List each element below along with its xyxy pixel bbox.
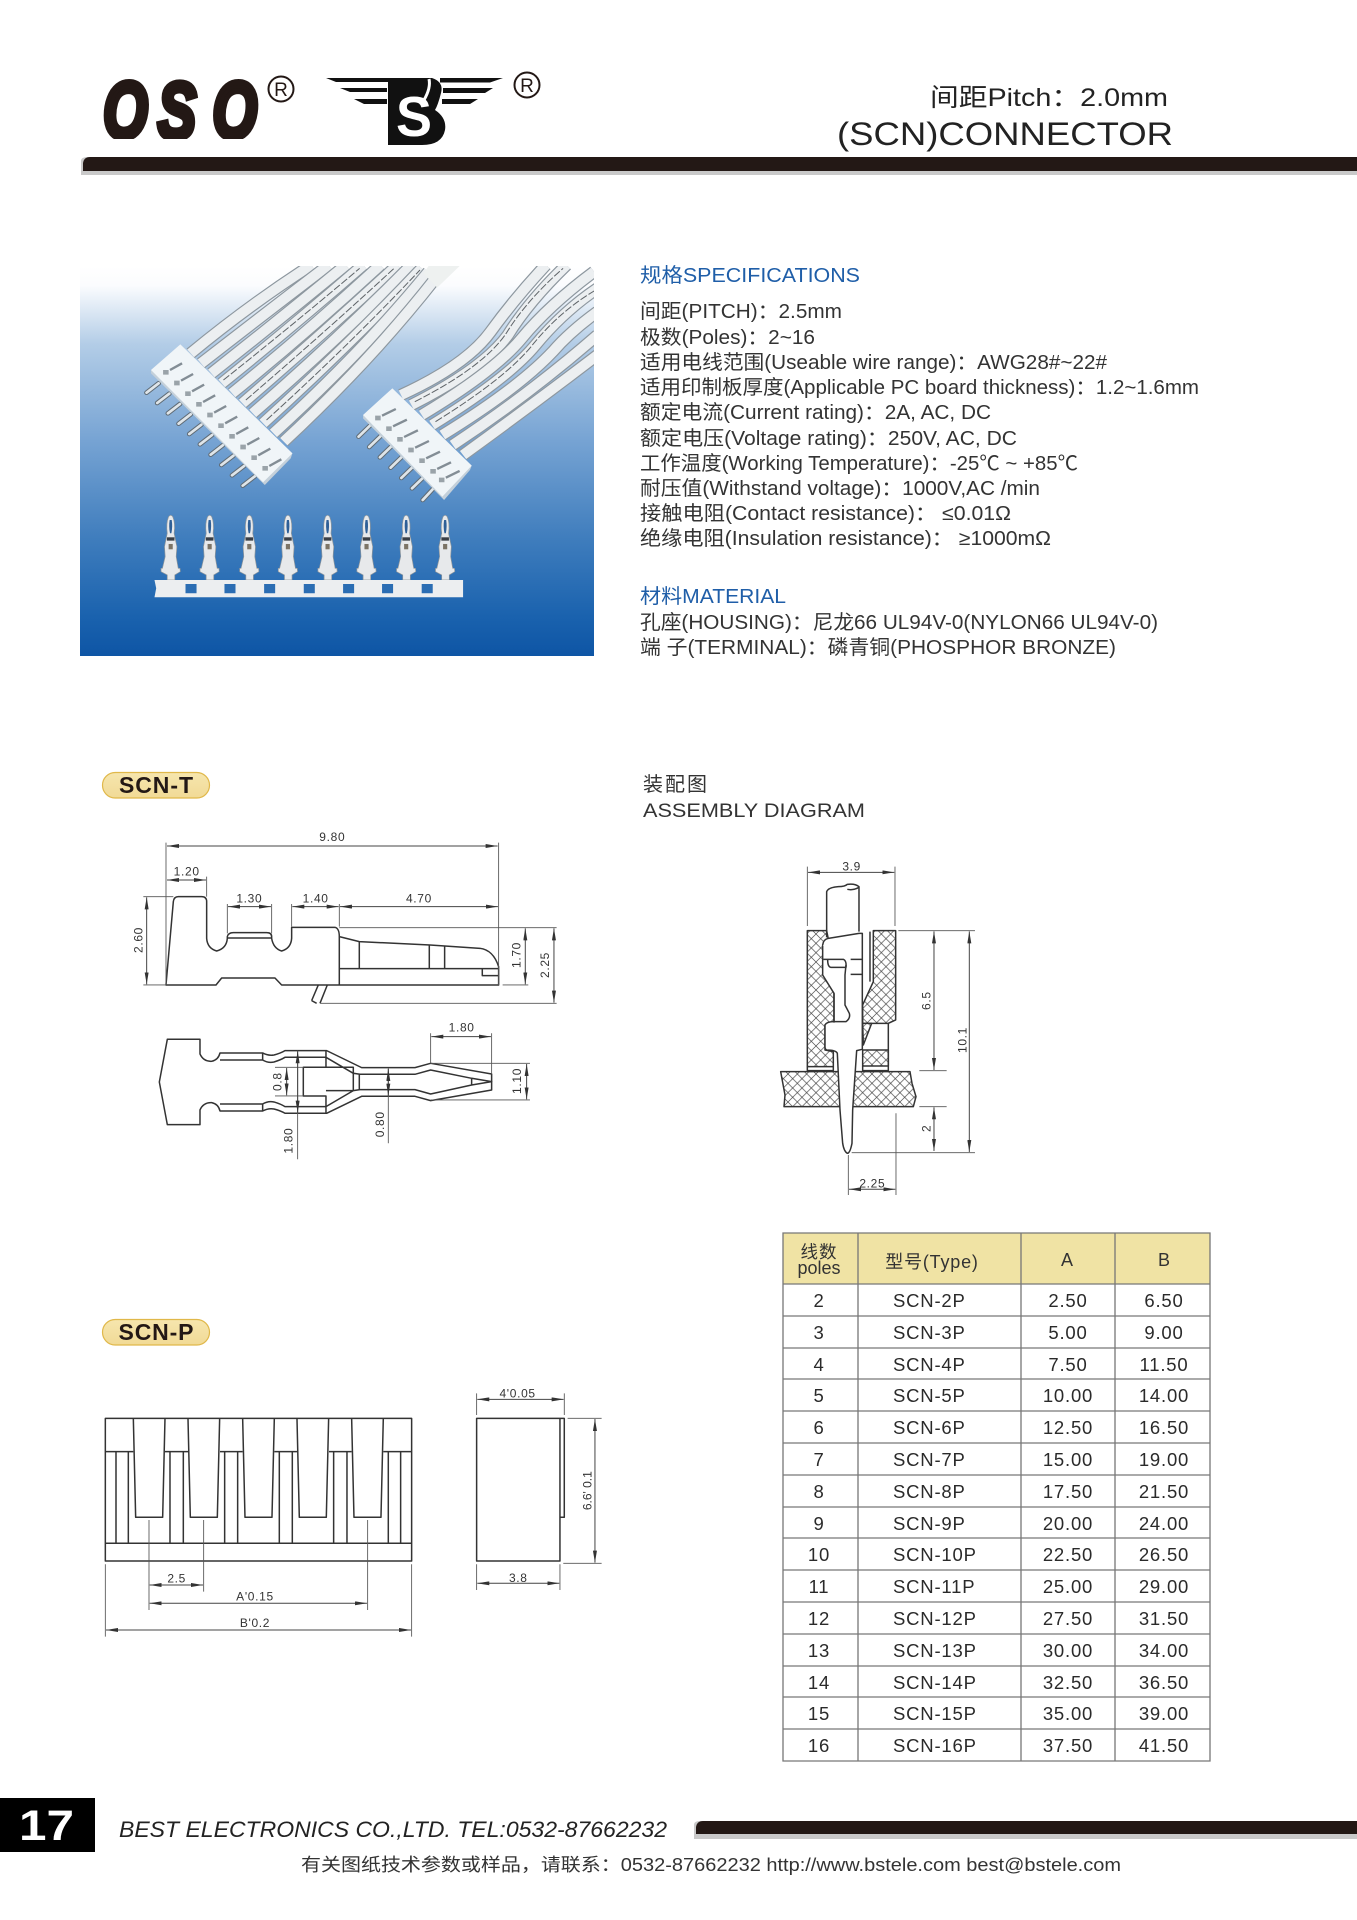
material lines: 孔座(HOUSING)：尼龙66 UL94V-0(NYLON66 UL94V-0) xyxy=(640,611,1158,634)
footer company: BEST ELECTRONICS CO.,LTD. TEL:0532-87662232 xyxy=(119,1817,667,1842)
dimensions: assembly: 6.5 xyxy=(920,991,934,1010)
table rows: 2.50 xyxy=(1048,1290,1088,1311)
table rows: 26.50 xyxy=(1139,1544,1189,1565)
spec lines: 耐压值(Withstand voltage)：1000V,AC /min xyxy=(640,477,1040,500)
spec lines: 极数(Poles)：2~16 xyxy=(640,326,815,349)
dimensions: terminal: 1.80 xyxy=(281,1128,295,1154)
specifications block xyxy=(640,264,1199,659)
table rows: 5.00 xyxy=(1048,1322,1088,1343)
table rows: 27.50 xyxy=(1043,1608,1093,1629)
wires: right bundle xyxy=(401,265,598,455)
terminal strip xyxy=(154,515,463,597)
table rows: SCN-8P xyxy=(893,1481,966,1502)
table rows: 39.00 xyxy=(1139,1703,1189,1724)
logo: TS winged xyxy=(326,72,540,149)
table rows: 37.50 xyxy=(1043,1735,1093,1756)
table rows: 36.50 xyxy=(1139,1672,1189,1693)
table rows: SCN-14P xyxy=(893,1672,977,1693)
spec lines: 适用电线范围(Useable wire range)：AWG28#~22# xyxy=(640,351,1108,374)
material lines: 端 子(TERMINAL)：磷青铜(PHOSPHOR BRONZE) xyxy=(640,636,1116,659)
table header: 线数 xyxy=(800,1242,838,1262)
terminal top view xyxy=(159,1039,492,1125)
footer bar xyxy=(694,1821,1357,1839)
table rows: SCN-5P xyxy=(893,1385,966,1406)
table rows: 29.00 xyxy=(1139,1576,1189,1597)
dimensions: housing: 3.8 xyxy=(509,1571,528,1585)
table rows: SCN-15P xyxy=(893,1703,977,1724)
table rows: 20.00 xyxy=(1043,1513,1093,1534)
table rows: SCN-16P xyxy=(893,1735,977,1756)
table rows: 14.00 xyxy=(1139,1385,1189,1406)
table rows: 7 xyxy=(813,1449,825,1470)
spec lines: 额定电流(Current rating)：2A, AC, DC xyxy=(640,401,991,424)
material lines xyxy=(640,611,1158,659)
header bar xyxy=(81,157,1357,175)
table rows: SCN-13P xyxy=(893,1640,977,1661)
logo: QSQ: R xyxy=(274,80,288,101)
table rows: SCN-3P xyxy=(893,1322,966,1343)
table rows: 19.00 xyxy=(1139,1449,1189,1470)
table rows: 16 xyxy=(808,1735,830,1756)
heading: specifications: 规格SPECIFICATIONS xyxy=(640,264,860,287)
table rows: 21.50 xyxy=(1139,1481,1189,1502)
dimensions: assembly: 3.9 xyxy=(842,860,861,874)
table rows: SCN-4P xyxy=(893,1354,966,1375)
table grid xyxy=(783,1233,1210,1761)
logo: QSQ xyxy=(104,76,294,139)
page number: 17 xyxy=(19,1802,74,1850)
table rows: 7.50 xyxy=(1048,1354,1088,1375)
dimensions: housing: 4'0.05 xyxy=(499,1387,536,1401)
table rows: 16.50 xyxy=(1139,1417,1189,1438)
dimensions: terminal: 4.70 xyxy=(406,891,432,905)
footer contact: 有关图纸技术参数或样品，请联系：0532-87662232 http://www.bstele.com best@bstele.com xyxy=(301,1855,1121,1875)
page number xyxy=(0,1798,95,1852)
table rows: 9 xyxy=(813,1513,825,1534)
table rows: SCN-2P xyxy=(893,1290,966,1311)
table rows: SCN-10P xyxy=(893,1544,977,1565)
heading: assembly diagram: 装配图 xyxy=(643,773,707,796)
drawing: housing SCN-P xyxy=(105,1387,602,1637)
label: SCN-P: SCN-P xyxy=(118,1319,194,1345)
spec lines: 额定电压(Voltage rating)：250V, AC, DC xyxy=(640,427,1017,450)
heading: assembly diagram: ASSEMBLY DIAGRAM xyxy=(643,800,865,822)
table rows: 11 xyxy=(809,1576,829,1597)
housing side view xyxy=(477,1418,564,1561)
table header: A xyxy=(1061,1250,1073,1270)
dimensions: terminal: 2.25 xyxy=(538,952,552,978)
table rows: 6.50 xyxy=(1144,1290,1184,1311)
dimensions: terminal: 1.40 xyxy=(303,891,329,905)
spec lines: 间距(PITCH)：2.5mm xyxy=(640,300,842,323)
dimensions: housing xyxy=(105,1387,602,1637)
logo: TS winged: R xyxy=(520,76,534,97)
spec lines xyxy=(640,300,1199,550)
dimensions: terminal: 2.60 xyxy=(131,927,145,953)
pins: right connector xyxy=(359,425,435,500)
table rows: 31.50 xyxy=(1139,1608,1189,1629)
spec lines: 绝缘电阻(Insulation resistance)： ≥1000mΩ xyxy=(640,527,1051,550)
table rows: 25.00 xyxy=(1043,1576,1093,1597)
table rows: 17.50 xyxy=(1043,1481,1093,1502)
hatched housing and board xyxy=(781,931,916,1107)
dimensions: housing: 6.6' 0.1 xyxy=(580,1471,594,1510)
connector: right xyxy=(363,388,472,500)
dimensions: housing: 2.5 xyxy=(167,1572,186,1586)
dimensions: housing: B'0.2 xyxy=(240,1616,270,1630)
table rows: 15 xyxy=(808,1703,830,1724)
housing front view xyxy=(105,1418,412,1561)
table rows: 12 xyxy=(808,1608,830,1629)
table rows: 41.50 xyxy=(1139,1735,1189,1756)
wires: left bundle xyxy=(191,265,460,442)
dimensions: terminal: 1.80 xyxy=(449,1021,475,1035)
dimensions: assembly: 10.1 xyxy=(956,1027,970,1053)
table rows: 2 xyxy=(813,1290,825,1311)
table rows: 10.00 xyxy=(1043,1385,1093,1406)
product photo xyxy=(80,265,598,656)
dimensions: terminal: 1.30 xyxy=(236,891,262,905)
label: SCN-T: SCN-T xyxy=(119,772,193,798)
table rows: SCN-9P xyxy=(893,1513,966,1534)
table rows: 6 xyxy=(813,1417,825,1438)
table rows: 15.00 xyxy=(1043,1449,1093,1470)
drawing: assembly xyxy=(781,860,975,1195)
table rows: 9.00 xyxy=(1144,1322,1184,1343)
table rows: 32.50 xyxy=(1043,1672,1093,1693)
table rows: 11.50 xyxy=(1140,1354,1188,1375)
table rows xyxy=(808,1290,1189,1756)
dimensions: assembly xyxy=(807,860,975,1195)
table rows: SCN-6P xyxy=(893,1417,966,1438)
dimensions: terminal: 0.80 xyxy=(373,1111,387,1137)
table rows: 4 xyxy=(813,1354,825,1375)
dimensions: assembly: 2 xyxy=(920,1125,934,1132)
table header: B xyxy=(1158,1250,1170,1270)
spec lines: 工作温度(Working Temperature)：-25℃ ~ +85℃ xyxy=(640,452,1078,475)
table header xyxy=(783,1233,1210,1284)
table rows: 35.00 xyxy=(1043,1703,1093,1724)
label: SCN-T xyxy=(102,772,210,798)
table rows: SCN-7P xyxy=(893,1449,966,1470)
table header: 型号(Type) xyxy=(885,1252,979,1272)
dimensions: terminal: 1.70 xyxy=(510,942,524,968)
table: part dimensions xyxy=(783,1233,1210,1761)
dimensions: terminal: 9.80 xyxy=(319,830,345,844)
title: connector: (SCN)CONNECTOR xyxy=(837,116,1173,152)
dimensions: terminal: 1.10 xyxy=(510,1068,524,1094)
table rows: SCN-12P xyxy=(893,1608,977,1629)
table rows: 30.00 xyxy=(1043,1640,1093,1661)
drawing: terminal SCN-T xyxy=(131,830,557,1159)
spec lines: 适用印制板厚度(Applicable PC board thickness)：1.2~1.6mm xyxy=(640,376,1199,399)
table rows: 3 xyxy=(813,1322,825,1343)
table rows: 22.50 xyxy=(1043,1544,1093,1565)
dimensions: terminal: 1.20 xyxy=(174,864,200,878)
spec lines: 接触电阻(Contact resistance)： ≤0.01Ω xyxy=(640,502,1011,525)
table header: poles xyxy=(797,1258,841,1278)
logo: TS winged: S xyxy=(396,85,432,149)
table rows: 13 xyxy=(808,1640,830,1661)
table rows: 5 xyxy=(813,1385,825,1406)
dimensions: housing: A'0.15 xyxy=(236,1589,274,1603)
dimensions: assembly: 2.25 xyxy=(859,1176,885,1190)
table rows: 24.00 xyxy=(1139,1513,1189,1534)
subtitle: pitch: 间距Pitch：2.0mm xyxy=(930,84,1168,112)
heading: assembly diagram xyxy=(643,773,865,822)
terminal side view xyxy=(166,897,499,1003)
logo: QSQ: QSQ xyxy=(103,66,257,155)
table rows: 10 xyxy=(808,1544,830,1565)
wire and terminal xyxy=(807,884,888,1153)
dimensions: terminal: 0.8 xyxy=(270,1072,284,1091)
table rows: 34.00 xyxy=(1139,1640,1189,1661)
table rows: SCN-11P xyxy=(893,1576,975,1597)
heading: material: 材料MATERIAL xyxy=(640,585,786,608)
table rows: 14 xyxy=(808,1672,830,1693)
table rows: 12.50 xyxy=(1043,1417,1093,1438)
pins: left connector xyxy=(147,383,255,486)
table rows: 8 xyxy=(813,1481,825,1502)
dimensions: terminal xyxy=(131,830,557,1159)
connector: left xyxy=(151,344,292,485)
